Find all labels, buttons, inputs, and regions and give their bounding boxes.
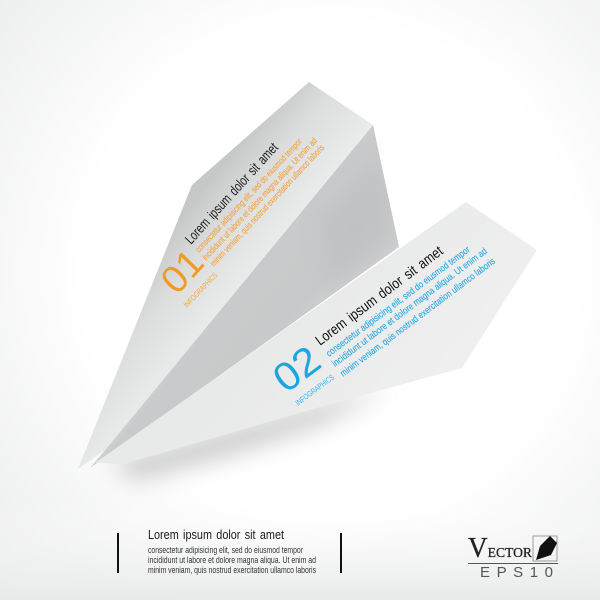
- left wing: number 01: 01: [153, 241, 212, 302]
- plane shadow: [110, 388, 390, 480]
- footer left bar: [117, 533, 119, 573]
- footer text block: [148, 528, 316, 575]
- left wing: body text: incididunt ut labore et dolore magna aliqua. Ut enim ad: [200, 136, 319, 262]
- right wing: body text: minim veniam, quis nostrud exercitation ullamco laboris: [338, 256, 498, 379]
- footer body: minim veniam, quis nostrud exercitation ullamco laboris: [148, 565, 316, 575]
- footer right bar: [340, 533, 342, 573]
- logo wordmark: VECTOR: [468, 533, 533, 564]
- right wing: infographics label: INFOGRAPHICS: [294, 373, 336, 408]
- logo rule: [468, 563, 558, 564]
- left wing: body text: minim veniam, quis nostrud exercitation ullamco laboris: [208, 142, 327, 268]
- left wing: infographics label: INFOGRAPHICS: [182, 271, 219, 309]
- footer body: [148, 545, 316, 575]
- paper plane: [78, 82, 537, 469]
- footer body: incididunt ut labore et dolore magna aliqua. Ut enim ad: [148, 555, 316, 565]
- left wing: heading: Lorem ipsum dolor sit amet: [182, 139, 281, 247]
- footer heading: Lorem ipsum dolor sit amet: [148, 528, 284, 542]
- right wing: heading: Lorem ipsum dolor sit amet: [313, 243, 446, 349]
- left wing outer face: [78, 82, 373, 469]
- footer body: consectetur adipisicing elit, sed do eiusmod tempor: [148, 545, 303, 555]
- left wing: body text: [193, 136, 327, 268]
- icon: pen nib in box: [533, 536, 557, 561]
- left wing: body text: consectetur adipisicing elit, sed do eiusmod tempor: [193, 137, 304, 254]
- upper body shading: [338, 195, 391, 266]
- logo eps10: EPS10: [480, 564, 553, 581]
- plane body inner fold: [90, 125, 399, 468]
- vector eps10 logo: [468, 533, 558, 581]
- right wing: body text: incididunt ut labore et dolore magna aliqua. Ut enim ad: [330, 246, 490, 369]
- right wing: number 02: 02: [265, 338, 329, 401]
- right wing: [95, 202, 537, 464]
- right wing: body text: consectetur adipisicing elit, sed do eiusmod tempor: [324, 244, 472, 359]
